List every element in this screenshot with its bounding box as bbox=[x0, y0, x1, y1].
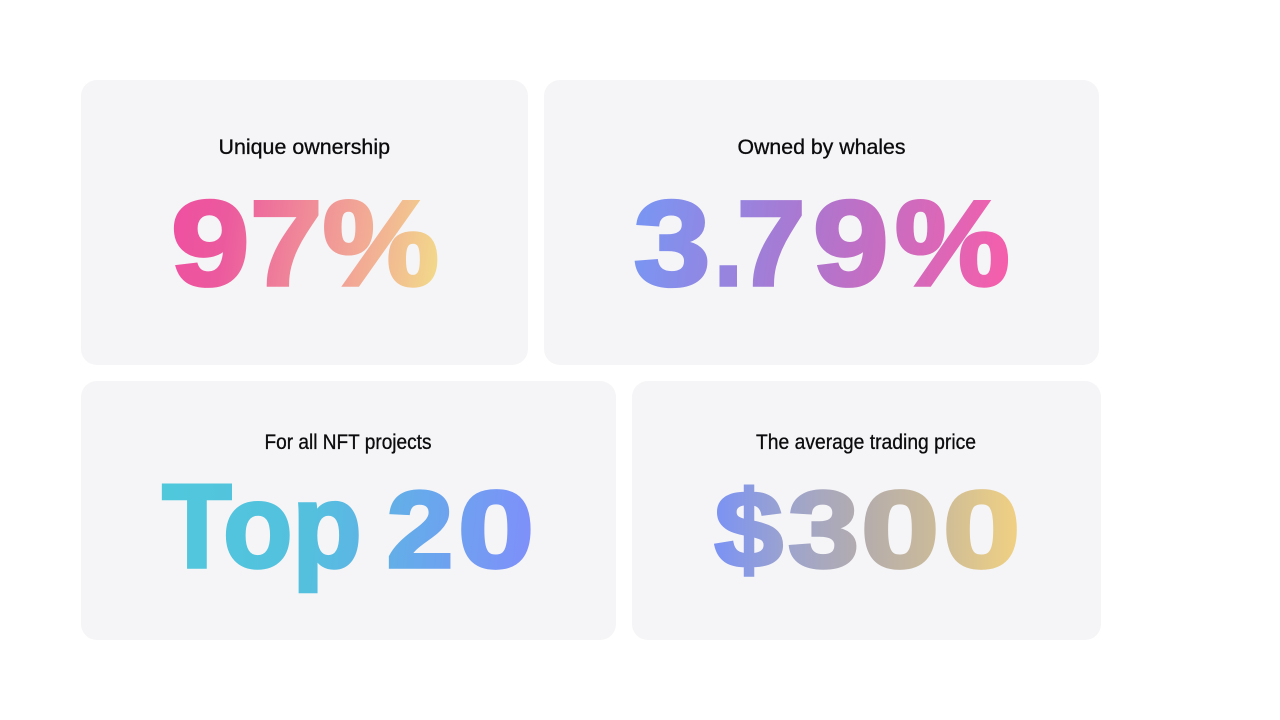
stat: 97%: 9 bbox=[171, 175, 250, 311]
panel: for all NFT projects bbox=[81, 381, 616, 640]
stat: 97%: 7 bbox=[250, 175, 322, 311]
stat: Top 20: 2 bbox=[387, 469, 453, 591]
stat: 3.79%: 3 bbox=[634, 175, 710, 311]
stat: 3.79% bbox=[634, 175, 1010, 311]
panel: owned by whales bbox=[544, 80, 1099, 365]
stat: $300 bbox=[715, 469, 1020, 591]
stat: 97%: % bbox=[323, 175, 439, 311]
panel: the average trading price bbox=[632, 381, 1101, 640]
stat: 3.79%: . bbox=[714, 175, 743, 311]
panel: unique ownership bbox=[81, 80, 528, 365]
stat: 3.79%: 9 bbox=[813, 175, 889, 311]
stat: $300: 0 bbox=[943, 469, 1020, 591]
stat: Top 20: Top bbox=[162, 460, 362, 593]
label: for all NFT projects: For all NFT projects bbox=[264, 431, 432, 454]
stat: Top 20: 0 bbox=[458, 469, 534, 591]
stat: Top 20 bbox=[162, 460, 534, 593]
stat: $300: 0 bbox=[861, 469, 939, 591]
stat: 97% bbox=[171, 175, 439, 311]
stat: $300: $ bbox=[715, 469, 783, 591]
stat: $300: 3 bbox=[788, 469, 859, 591]
stat: 3.79%: 7 bbox=[737, 175, 805, 311]
label: owned by whales: Owned by whales bbox=[738, 136, 906, 159]
stat: 3.79%: % bbox=[895, 175, 1010, 311]
label: unique ownership: Unique ownership bbox=[218, 136, 390, 159]
label: the average trading price: The average trading price bbox=[756, 431, 976, 454]
